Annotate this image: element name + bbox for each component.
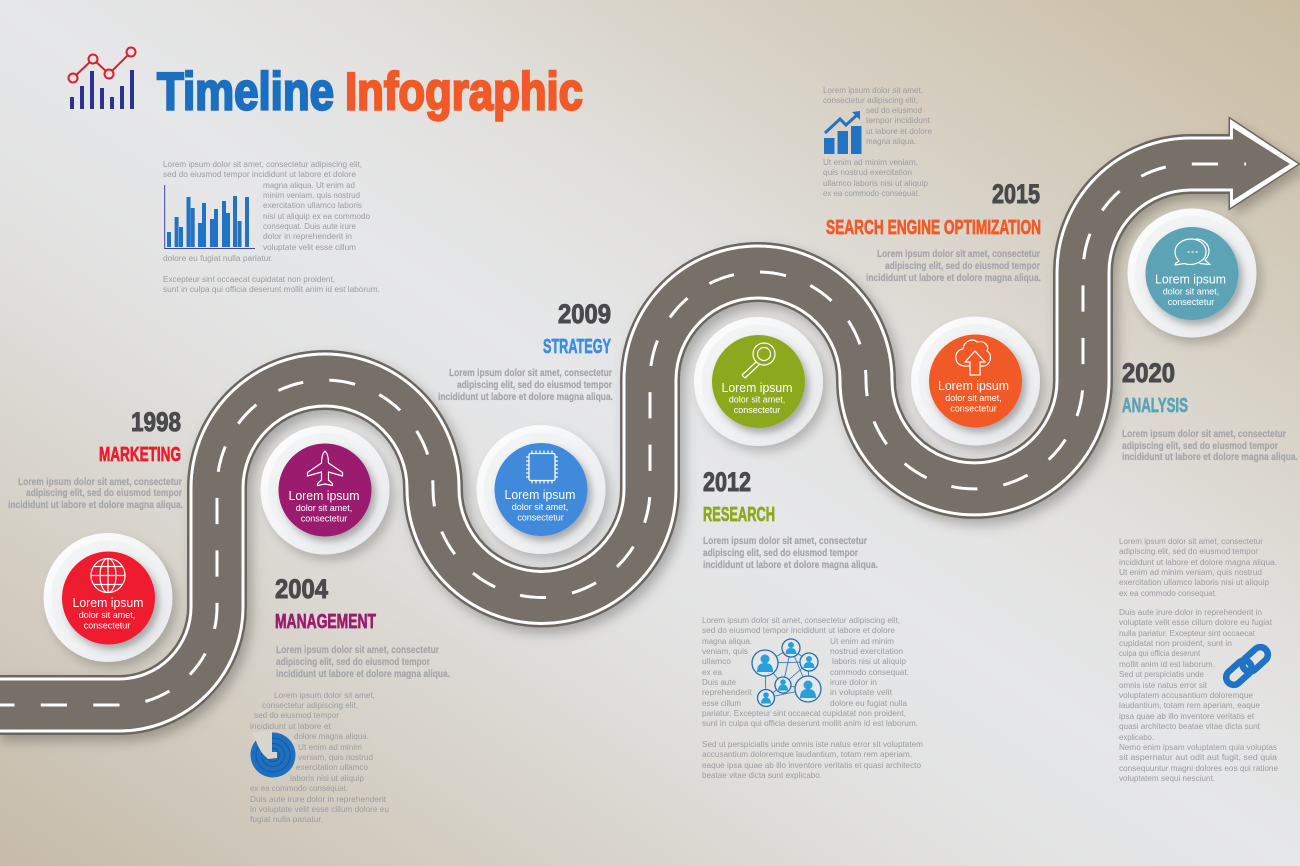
text block: bottom right with chain icon: culpa qui officia deserunt xyxy=(1119,648,1201,658)
label 2015 search engine optimization xyxy=(826,179,1041,284)
label 2015 search engine optimization: Lorem ipsum dolor sit amet, consectetur xyxy=(877,248,1040,260)
text block: bottom centre with network icon: nostrud exercitation xyxy=(830,646,903,656)
icon: globe xyxy=(91,558,125,592)
milestone 2015: orange circle: dolor sit amet, xyxy=(945,393,1002,403)
text block: bottom right with chain icon: mollit anim id est laborum. xyxy=(1119,659,1215,669)
milestone 2020: teal circle: Lorem ipsum xyxy=(1155,272,1226,286)
text block: bottom centre with network icon: in voluptate velit xyxy=(830,687,893,697)
text block: bottom centre with network icon: laboris nisi ut aliquip xyxy=(832,656,906,666)
milestone 2020: teal circle: dolor sit amet, xyxy=(1163,286,1219,296)
text block: bottom right with chain icon xyxy=(1119,536,1278,783)
text block: bottom centre with network icon: eaque ipsa quae ab illo inventore veritatis et quasi architecto xyxy=(702,760,921,770)
title: Timeline xyxy=(157,62,334,122)
label 2004 management: 2004 xyxy=(275,574,328,604)
bar chart xyxy=(165,185,255,248)
label 2015 search engine optimization: SEARCH ENGINE OPTIMIZATION xyxy=(826,217,1041,239)
text block: bottom left with pie icon: Duis aute irure dolor in reprehenderit xyxy=(250,794,387,804)
milestone 2009: blue circle: dolor sit amet, xyxy=(512,502,568,512)
text block: top left with bar chart: sed do eiusmod tempor incididunt ut labore et dolore xyxy=(163,169,356,179)
text block: top left with bar chart: nisi ut aliquip ex ea commodo xyxy=(263,211,370,221)
text block: bottom centre with network icon: irure dolor in xyxy=(830,677,877,687)
text block: top centre with rising chart: Lorem ipsum dolor sit amet, xyxy=(823,85,923,95)
title: Infographic xyxy=(345,62,583,122)
milestone 2009: blue circle xyxy=(476,425,606,554)
text block: top centre with rising chart: ex ea commodo consequat. xyxy=(823,188,920,198)
text block: bottom left with pie icon: ex ea commodo consequat. xyxy=(250,783,348,793)
text block: bottom centre with network icon: magna aliqua. xyxy=(702,636,752,646)
text block: bottom right with chain icon: laudantium, totam rem aperiam, eaque xyxy=(1119,700,1260,710)
milestone 2009: blue circle: consectetur xyxy=(517,512,564,522)
text block: bottom left with pie icon: sed do eiusmod tempor xyxy=(254,710,339,720)
milestone 2004: purple circle xyxy=(260,426,390,554)
text block: bottom left with pie icon: veniam, quis nostrud xyxy=(298,752,373,762)
text block: top left with bar chart: voluptate velit esse cillum xyxy=(263,242,356,252)
text block: bottom right with chain icon: voluptatem accusantium doloremque xyxy=(1119,690,1253,700)
label 2012 research: RESEARCH xyxy=(703,504,775,526)
milestone 2004: purple circle: consectetur xyxy=(301,514,347,524)
text block: bottom right with chain icon: sit aspernatur aut odit aut fugit, sed quia xyxy=(1119,752,1277,762)
text block: bottom centre with network icon: veniam, quis xyxy=(702,646,748,656)
text block: top left with bar chart: minim veniam, quis nostrud xyxy=(263,190,360,200)
label 2015 search engine optimization: 2015 xyxy=(992,179,1040,209)
text block: bottom left with pie icon: Lorem ipsum dolor sit amet, xyxy=(274,690,375,700)
text block: top left with bar chart xyxy=(163,159,380,294)
text block: bottom left with pie icon: dolore magna aliqua. xyxy=(294,731,369,741)
text block: top centre with rising chart: sed do eiusmod xyxy=(866,105,922,115)
text block: bottom right with chain icon: omnis iste natus error sit xyxy=(1119,680,1208,690)
icon: airplane xyxy=(308,451,342,486)
text block: bottom right with chain icon: Lorem ipsum dolor sit amet, consectetur xyxy=(1119,536,1263,546)
milestone 2012: green circle: consectetur xyxy=(734,405,780,415)
text block: top left with bar chart: magna aliqua. Ut enim ad xyxy=(263,180,355,190)
label 1998 marketing: incididunt ut labore et dolore magna aliqua. xyxy=(8,499,183,511)
icon: magnifier xyxy=(742,343,775,378)
milestone 2020: teal circle: consectetur xyxy=(1168,297,1214,307)
text block: bottom left with pie icon: fugiat nulla pariatur. xyxy=(250,814,323,824)
milestone 2012: green circle: dolor sit amet, xyxy=(729,394,785,404)
label 2004 management: incididunt ut labore et dolore magna aliqua. xyxy=(276,668,450,680)
icon: cloud upload xyxy=(956,340,990,375)
label 2012 research: 2012 xyxy=(703,467,751,497)
road with arrow xyxy=(0,119,1298,705)
text block: bottom centre with network icon: pariatur. Excepteur sint occaecat cupidatat non proident, xyxy=(702,708,906,718)
text block: bottom centre with network icon: sed do eiusmod tempor incididunt ut labore et dolore xyxy=(702,625,895,635)
text block: bottom left with pie icon: laboris nisi ut aliquip xyxy=(290,773,364,783)
text block: top left with bar chart: Excepteur sint occaecat cupidatat non proident, xyxy=(163,274,335,284)
label 2009 strategy: 2009 xyxy=(558,299,611,329)
label 1998 marketing: Lorem ipsum dolor sit amet, consectetur xyxy=(18,476,182,488)
label 2009 strategy: STRATEGY xyxy=(543,336,611,358)
label 2004 management: adipiscing elit, sed do eiusmod tempor xyxy=(276,656,430,668)
text block: bottom right with chain icon: voluptate velit esse cillum dolore eu fugiat xyxy=(1119,617,1273,627)
text block: bottom right with chain icon: cupidatat non proident, sunt in xyxy=(1119,638,1232,648)
text block: bottom centre with network icon: ullamco xyxy=(702,656,731,666)
text block: bottom right with chain icon: consequuntur magni dolores eos qui ratione xyxy=(1119,763,1278,773)
label 2015 search engine optimization: adipiscing elit, sed do eiusmod tempor xyxy=(885,260,1040,272)
text block: bottom right with chain icon: Ut enim ad minim veniam, quis nostrud xyxy=(1119,567,1262,577)
text block: bottom left with pie icon: Ut enim ad minim xyxy=(298,742,362,752)
text block: bottom right with chain icon: voluptatem sequi nesciunt. xyxy=(1119,773,1215,783)
text block: bottom centre with network icon: Sed ut perspiciatis unde omnis iste natus error sit voluptatem xyxy=(702,739,923,749)
milestone 2004: purple circle: Lorem ipsum xyxy=(288,488,360,503)
label 2004 management: MANAGEMENT xyxy=(275,611,376,633)
text block: bottom centre with network icon: beatae vitae dicta sunt explicabo. xyxy=(702,770,822,780)
icon: concentric pie xyxy=(250,730,296,778)
text block: top left with bar chart: sunt in culpa qui officia deserunt mollit anim id est laborum. xyxy=(163,284,380,294)
text block: bottom centre with network icon: accusantium doloremque laudantium, totam rem aperiam, xyxy=(702,749,912,759)
label 2020 analysis: ANALYSIS xyxy=(1122,395,1188,417)
icon: people network xyxy=(752,639,821,706)
label 2012 research: Lorem ipsum dolor sit amet, consectetur xyxy=(703,535,867,547)
milestone 2015: orange circle: Lorem ipsum xyxy=(938,378,1009,393)
text block: bottom right with chain icon: explicabo. xyxy=(1119,732,1154,742)
text block: bottom centre with network icon: dolore eu fugiat nulla xyxy=(830,698,907,708)
milestone 2004: purple circle: dolor sit amet, xyxy=(296,503,352,513)
milestone 2020: teal circle xyxy=(1128,208,1256,338)
text block: bottom centre with network icon: reprehenderit xyxy=(702,687,753,697)
text block: bottom right with chain icon: Duis aute irure dolor in reprehenderit in xyxy=(1119,607,1262,617)
text block: top left with bar chart: exercitation ullamco laboris xyxy=(263,200,362,210)
text block: bottom centre with network icon: Lorem ipsum dolor sit amet, consectetur adipiscing elit, xyxy=(702,615,900,625)
text block: bottom centre with network icon: Duis aute xyxy=(702,677,736,687)
milestone 1998: red circle: consectetur xyxy=(84,620,130,630)
icon: speech bubbles xyxy=(1175,239,1210,265)
text block: top centre with rising chart: ullamco laboris nisi ut aliquip xyxy=(823,178,928,188)
label 1998 marketing xyxy=(8,407,183,511)
milestone 2015: orange circle: consectetur xyxy=(950,404,997,414)
text block: bottom left with pie icon: in voluptate velit esse cillum dolore eu xyxy=(250,804,389,814)
label 2004 management: Lorem ipsum dolor sit amet, consectetur xyxy=(276,644,439,656)
text block: bottom centre with network icon: esse cillum xyxy=(702,698,741,708)
label 2012 research: adipiscing elit, sed do eiusmod tempor xyxy=(703,547,858,559)
milestone 2015: orange circle xyxy=(911,316,1040,446)
text block: bottom right with chain icon: ipsa quae ab illo inventore veritatis et xyxy=(1119,711,1255,721)
label 2004 management xyxy=(275,574,450,680)
text block: bottom centre with network icon: commodo consequat. xyxy=(830,667,909,677)
label 2020 analysis xyxy=(1122,358,1298,463)
label 2012 research xyxy=(703,467,878,571)
milestone 1998: red circle xyxy=(44,533,172,662)
icon: chip xyxy=(526,451,558,483)
text block: bottom right with chain icon: nulla pariatur. Excepteur sint occaecat xyxy=(1119,628,1256,638)
label 1998 marketing: MARKETING xyxy=(99,444,181,466)
text block: top centre with rising chart: consectetur adipiscing elit, xyxy=(823,95,918,105)
text block: top left with bar chart: dolor in reprehenderit in xyxy=(263,231,352,241)
text block: top left with bar chart: dolore eu fugiat nulla pariatur. xyxy=(163,253,273,263)
text block: bottom left with pie icon: consectetur adipiscing elit, xyxy=(262,700,358,710)
label 1998 marketing: adipiscing elit, sed do eiusmod tempor xyxy=(26,487,182,499)
text block: top centre with rising chart xyxy=(823,85,932,198)
text block: bottom right with chain icon: quasi architecto beatae vitae dicta sunt xyxy=(1119,721,1261,731)
text block: top centre with rising chart: ut labore et dolore xyxy=(866,126,932,136)
title xyxy=(157,62,583,122)
text block: bottom right with chain icon: Sed ut perspiciatis unde xyxy=(1119,669,1204,679)
text block: bottom centre with network icon xyxy=(702,615,923,780)
label 2009 strategy: incididunt ut labore et dolore magna aliqua. xyxy=(438,391,613,403)
label 2009 strategy xyxy=(438,299,613,403)
text block: top left with bar chart: Lorem ipsum dolor sit amet, consectetur adipiscing elit, xyxy=(163,159,362,169)
icon: rising bar chart xyxy=(824,111,862,154)
label 2009 strategy: Lorem ipsum dolor sit amet, consectetur xyxy=(449,367,612,379)
text block: bottom centre with network icon: Ut enim ad minim xyxy=(830,636,894,646)
milestone 2009: blue circle: Lorem ipsum xyxy=(504,487,576,502)
text block: bottom left with pie icon: incididunt ut labore et xyxy=(250,721,332,731)
text block: bottom right with chain icon: exercitation ullamco laboris nisi ut aliquip xyxy=(1119,577,1269,587)
icon: chain link xyxy=(1223,643,1271,689)
icon: title chart logo xyxy=(68,48,136,109)
label 2009 strategy: adipiscing elit, sed do eiusmod tempor xyxy=(457,379,612,391)
label 2012 research: incididunt ut labore et dolore magna aliqua. xyxy=(703,559,878,571)
text block: bottom right with chain icon: ex ea commodo consequat. xyxy=(1119,588,1217,598)
label 2015 search engine optimization: incididunt ut labore et dolore magna aliqua. xyxy=(866,272,1041,284)
text block: bottom left with pie icon: exercitation ullamco xyxy=(296,762,368,772)
milestone 2012: green circle: Lorem ipsum xyxy=(722,380,792,395)
text block: top centre with rising chart: tempor incididunt xyxy=(866,115,931,125)
text block: bottom right with chain icon: incididunt ut labore et dolore magna aliqua. xyxy=(1119,557,1277,567)
milestone 1998: red circle: dolor sit amet, xyxy=(79,610,135,620)
text block: bottom right with chain icon: adipiscing elit, sed do eiusmod tempor xyxy=(1119,546,1258,556)
text block: bottom centre with network icon: ex ea xyxy=(702,667,722,677)
label 2020 analysis: 2020 xyxy=(1122,358,1175,388)
text block: bottom centre with network icon: sunt in culpa qui officia deserunt mollit anim id est laborum. xyxy=(702,718,918,728)
text block: bottom left with pie icon xyxy=(250,690,389,824)
text block: bottom right with chain icon: Nemo enim ipsam voluptatem quia voluptas xyxy=(1119,742,1277,752)
milestone 2012: green circle xyxy=(694,317,823,446)
text block: top centre with rising chart: quis nostrud exercitation xyxy=(823,167,912,177)
text block: top centre with rising chart: Ut enim ad minim veniam, xyxy=(823,157,918,167)
text block: top left with bar chart: consequat. Duis aute irure xyxy=(263,221,356,231)
text block: top centre with rising chart: magna aliqua. xyxy=(866,136,916,146)
milestone 1998: red circle: Lorem ipsum xyxy=(72,595,144,610)
label 1998 marketing: 1998 xyxy=(131,407,181,437)
